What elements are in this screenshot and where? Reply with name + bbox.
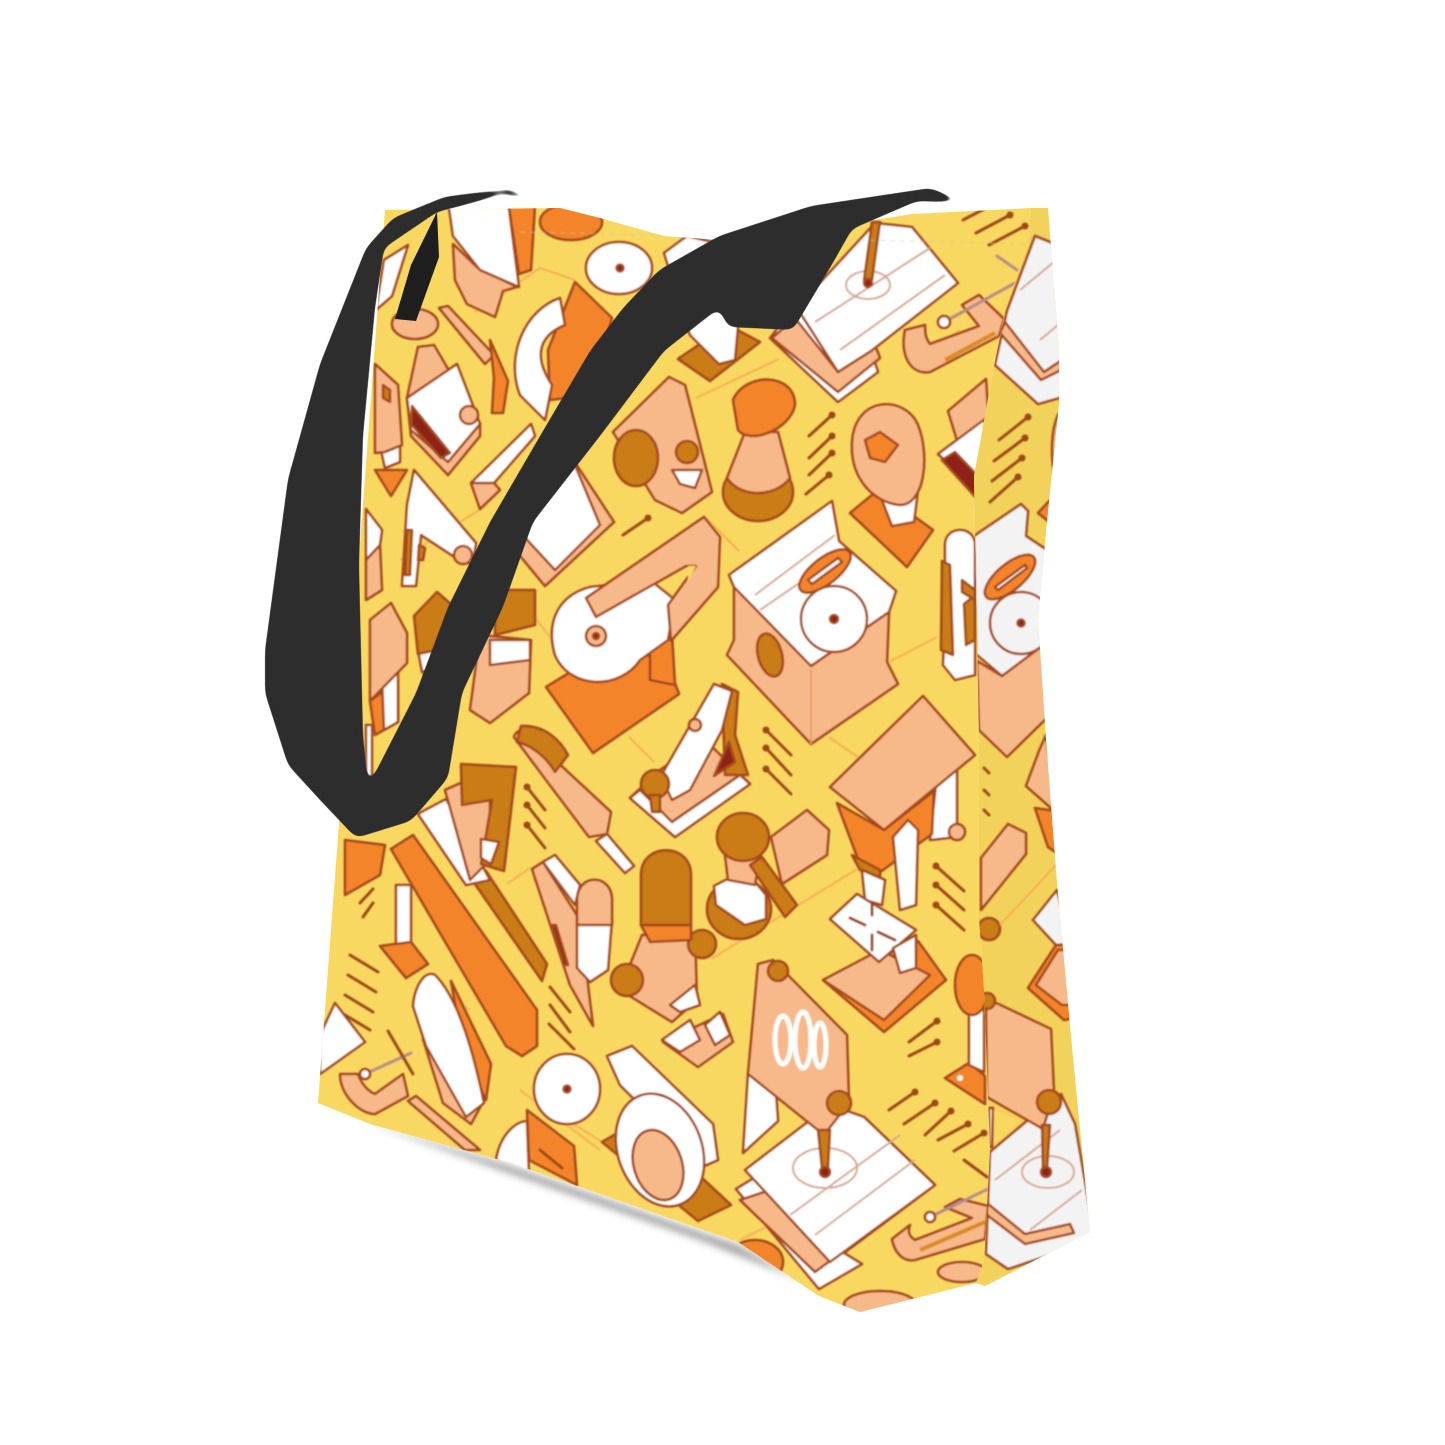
tool: peach column: [375, 364, 407, 496]
side tool: top jigsaw: [995, 236, 1070, 404]
icon: saw blade bottom: [534, 1054, 600, 1124]
panel: bag front: [300, 190, 1060, 1330]
tool: top circular saw: [448, 201, 602, 317]
tool: drill press: [823, 696, 975, 1032]
tool: right sander: [938, 379, 990, 502]
logo mark: [775, 1012, 826, 1068]
tool: power drill: [402, 470, 476, 586]
connector lines: [400, 268, 960, 1240]
tool: small planer base: [471, 424, 614, 586]
tool: bottom orange box: [496, 1110, 577, 1185]
tool: left circular saw: [413, 974, 491, 1124]
side tool: table saw: [974, 504, 1060, 757]
side tool: drill press: [978, 735, 1075, 1020]
tool: bottom-left white panel: [320, 1003, 365, 1074]
tool: partly hidden router: [470, 590, 535, 723]
tool: head sander: [850, 404, 933, 567]
tool: plunge router: [611, 850, 733, 1067]
tool: left sliver: [366, 509, 382, 600]
side tool: clipped sander: [1038, 410, 1076, 524]
tool: left router pair: [364, 590, 451, 776]
top seam: [520, 232, 1030, 244]
strap: handle loop: [265, 188, 969, 838]
tool: hand planer: [630, 684, 750, 837]
panel: bag side gusset: [970, 200, 1100, 1300]
bag ground shadow: [365, 1122, 800, 1280]
tool: orbital sander: [707, 810, 829, 939]
tool: electric planer: [613, 377, 712, 513]
tool: belt sander: [407, 345, 480, 475]
tool: white piece under strap: [376, 245, 408, 310]
tool: router top: [723, 380, 795, 521]
tool: bottom jigsaw: [736, 960, 935, 1289]
tool: bottom circular saw: [601, 1046, 731, 1221]
side nail ticks: [990, 417, 1028, 502]
tool: white column: [941, 530, 975, 680]
tool: bottom clamp: [892, 1160, 988, 1260]
icon: saw blade top: [586, 242, 652, 294]
bottom clipped shapes: [727, 1240, 986, 1319]
tool: multi tool: [514, 726, 634, 873]
tool: top jigsaw: [770, 222, 958, 402]
small nail ticks: [345, 208, 1025, 1177]
tool: bandsaw: [546, 517, 720, 753]
tool: left clamp: [340, 1031, 413, 1114]
tool: lower jigsaw front part: [945, 955, 989, 1104]
tool: circular saw 2: [515, 282, 612, 420]
tote bag: [300, 190, 1100, 1330]
tool: slot oval under strap: [392, 309, 438, 339]
tool: chainsaw: [345, 764, 547, 1056]
tool: top-middle saw: [664, 236, 760, 381]
tool: top clamp: [904, 256, 1017, 372]
tool: bottom hammer: [408, 1096, 480, 1150]
side tool: jigsaw lower: [979, 993, 1095, 1269]
tool: table saw: [727, 501, 898, 744]
tool: nail gun: [532, 855, 612, 1026]
strap: inner end: [395, 212, 439, 321]
tool: hammer: [439, 306, 508, 413]
